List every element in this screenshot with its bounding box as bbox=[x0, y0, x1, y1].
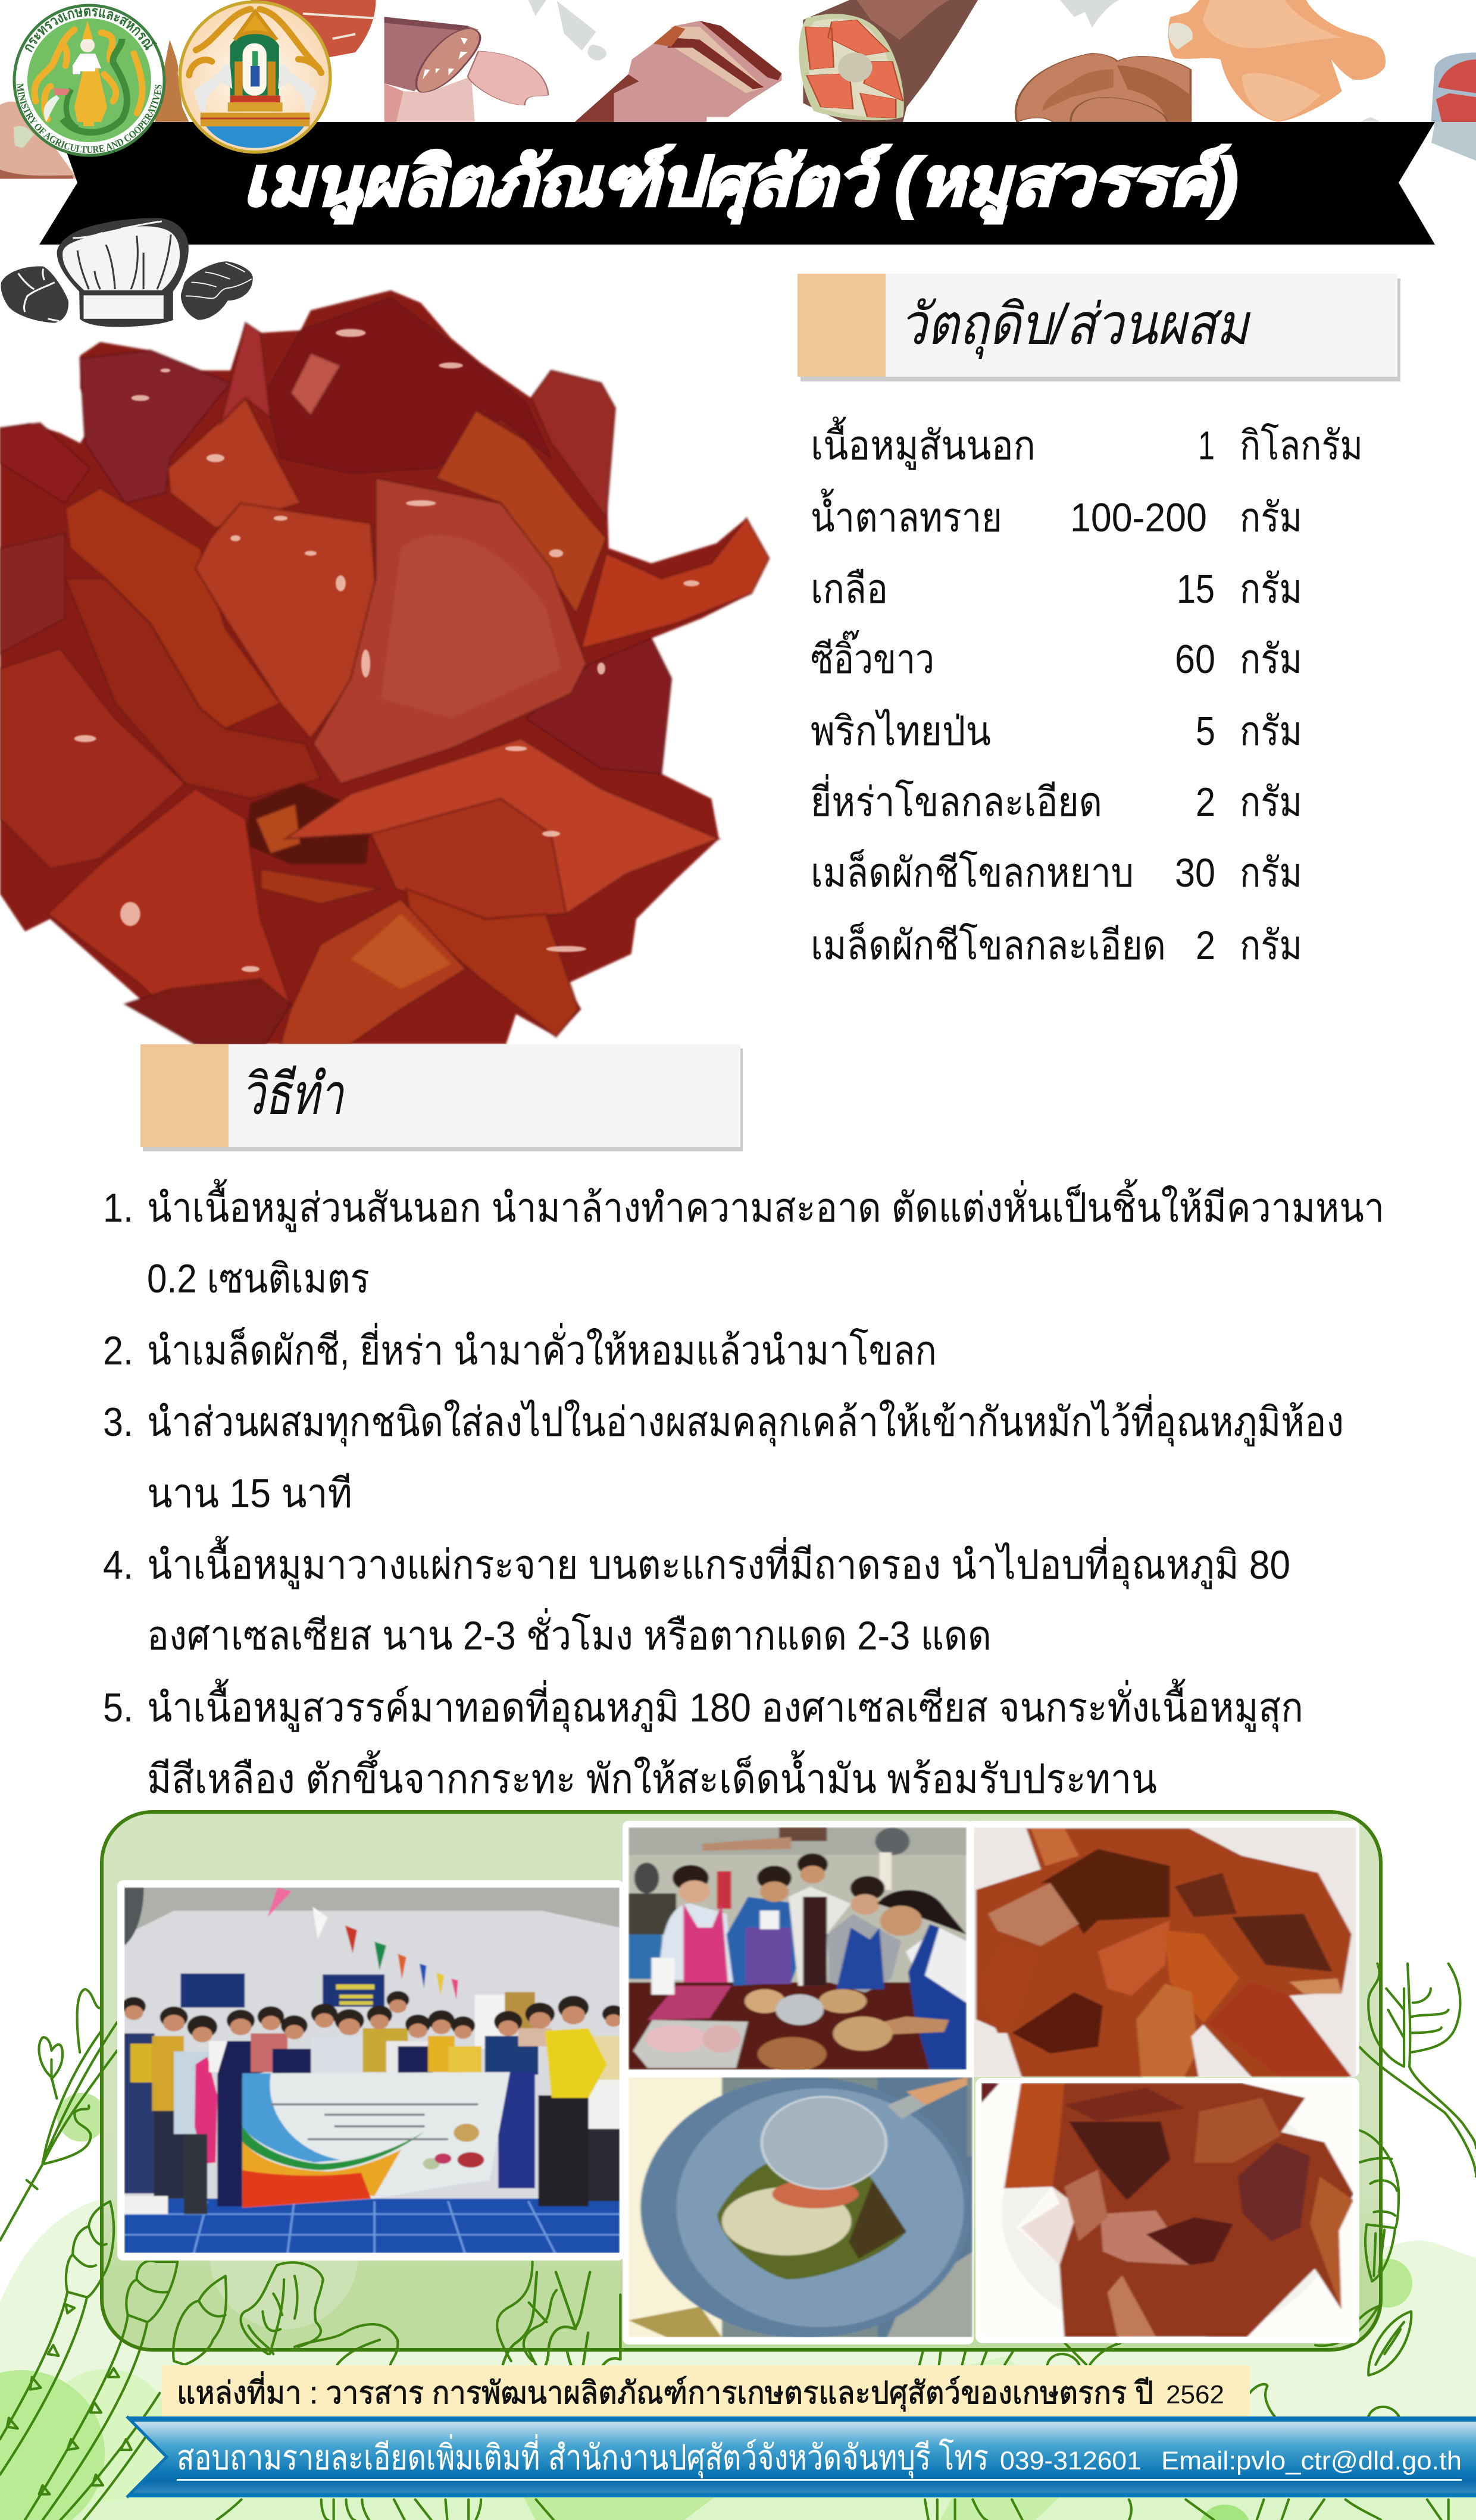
contact ribbon: 039-312601 bbox=[1000, 2446, 1142, 2475]
ingredients list: เนื้อหมูสันนอก bbox=[811, 417, 1036, 470]
illustration: ham tail at right edge below the ribbon top bbox=[1431, 122, 1476, 161]
icon: steak left bbox=[1, 267, 68, 323]
illustration: ham hock bbox=[799, 0, 978, 122]
photo: group with banner bbox=[117, 1880, 625, 2261]
illustration: grey knife shapes bbox=[529, 0, 1381, 122]
ingredients list: กรัม bbox=[1240, 850, 1302, 896]
method steps: มีสีเหลือง ตักขึ้นจากกระทะ พักให้สะเด็ดน้ำมัน พร้อมรับประทาน bbox=[147, 1750, 1157, 1802]
ingredients list: กรัม bbox=[1240, 780, 1302, 825]
method steps: นำส่วนผสมทุกชนิดใส่ลงไปในอ่างผสมคลุกเคล้าให้เข้ากันหมักไว้ที่อุณหภูมิห้อง bbox=[147, 1394, 1344, 1447]
contact ribbon bbox=[127, 2416, 1476, 2497]
logo: Ministry of Agriculture and Cooperatives: MINISTRY OF AGRICULTURE AND COOPERATIVES bbox=[17, 83, 162, 154]
method steps: 3. bbox=[103, 1400, 133, 1445]
method steps: นาน 15 นาที bbox=[147, 1471, 352, 1516]
ingredients list: พริกไทยป่น bbox=[811, 708, 991, 754]
panel: method heading bbox=[140, 1044, 743, 1151]
method steps: องศาเซลเซียส นาน 2-3 ชั่วโมง หรือตากแดด 2-3 แดด bbox=[147, 1608, 992, 1658]
ingredients list: 1 bbox=[1198, 423, 1215, 468]
icon: chef hat with steaks bbox=[1, 218, 253, 327]
panel: method heading: วิธีทำ bbox=[241, 1063, 345, 1126]
method steps: 4. bbox=[103, 1542, 133, 1588]
illustration: meats behind logos bbox=[0, 0, 376, 179]
panel: photo collage background bbox=[102, 1812, 1381, 2350]
icon: chef hat bbox=[57, 218, 189, 327]
ingredients list: เมล็ดผักชีโขลกละเอียด bbox=[811, 922, 1166, 968]
ingredients list: 2 bbox=[1196, 780, 1215, 825]
ingredients list: เกลือ bbox=[811, 566, 888, 612]
ingredients list: น้ำตาลทราย bbox=[811, 489, 1002, 540]
background: green hills bbox=[0, 2093, 1476, 2520]
background: leaf outlines, left side bbox=[0, 1989, 556, 2520]
ingredients list: 2 bbox=[1196, 923, 1215, 968]
ingredients list: 100-200 bbox=[1070, 495, 1207, 540]
panel: ingredients heading bbox=[798, 274, 1400, 381]
collage white frames bbox=[623, 1821, 1359, 2344]
ingredients list: 15 bbox=[1177, 566, 1215, 612]
background: leaf outlines, right side bbox=[920, 1964, 1476, 2520]
ingredients list: กรัม bbox=[1240, 709, 1302, 754]
illustration: sausage links bbox=[1016, 53, 1190, 122]
illustration: sliced ham bbox=[575, 21, 781, 122]
ingredients list: กรัม bbox=[1240, 566, 1302, 612]
contact ribbon: Email:pvlo_ctr@dld.go.th bbox=[1161, 2446, 1462, 2475]
ingredients list: กรัม bbox=[1240, 923, 1302, 968]
method steps: นำเนื้อหมูสวรรค์มาทอดที่อุณหภูมิ 180 องศาเซลเซียส จนกระทั่งเนื้อหมูสุก bbox=[147, 1679, 1303, 1732]
illustration: ham at right edge bbox=[1431, 52, 1476, 122]
title ribbon bbox=[39, 122, 1435, 245]
illustration: sausage slices bbox=[384, 17, 548, 122]
background: leaf lines under the source bar centre bbox=[500, 2272, 1068, 2520]
logo: Ministry of Agriculture and Cooperatives: กระทรวงเกษตรและสหกรณ์ bbox=[25, 8, 157, 52]
method steps: 1. bbox=[103, 1185, 133, 1231]
ingredients list: เมล็ดผักชีโขลกหยาบ bbox=[811, 849, 1134, 896]
ingredients list: ซีอิ๊วขาว bbox=[811, 630, 934, 682]
method steps: 5. bbox=[103, 1685, 133, 1730]
ingredients list: ยี่หร่าโขลกละเอียด bbox=[811, 774, 1102, 825]
illustration: chicken leg bbox=[1168, 0, 1386, 122]
ingredients list: 60 bbox=[1175, 637, 1215, 682]
ingredients list: 5 bbox=[1196, 709, 1215, 754]
contact ribbon: สอบถามรายละเอียดเพิ่มเติมที่ สำนักงานปศุสัตว์จังหวัดจันทบุรี โทร bbox=[177, 2434, 989, 2479]
method steps bbox=[103, 1179, 1384, 1802]
logo: Ministry of Agriculture and Cooperatives bbox=[13, 4, 165, 157]
photo: cooked pork, bottom right bbox=[981, 2083, 1353, 2340]
photo: preparing the pork bbox=[628, 1827, 967, 2071]
ingredients list bbox=[811, 417, 1363, 968]
photo: cooked pork, top right bbox=[974, 1827, 1356, 2077]
source bar: แหล่งที่มา : วารสาร การพัฒนาผลิตภัณฑ์การเกษตรและปศุสัตว์ของเกษตรกร ปี bbox=[177, 2371, 1153, 2412]
ingredients list: กรัม bbox=[1240, 495, 1302, 540]
method steps: 0.2 เซนติเมตร bbox=[147, 1256, 370, 1301]
panel border bbox=[102, 1812, 1381, 2350]
background: meat illustrations along the top bbox=[0, 0, 1476, 179]
logo: Department of Livestock Development bbox=[180, 2, 330, 152]
method steps: นำเนื้อหมูมาวางแผ่กระจาย บนตะแกรงที่มีถาดรอง นำไปอบที่อุณหภูมิ 80 bbox=[147, 1536, 1290, 1589]
photo: frying in a wok bbox=[628, 2077, 972, 2338]
photo: golden fried pork pile bbox=[0, 290, 769, 1044]
panel: ingredients heading: วัตถุดิบ/ส่วนผสม bbox=[899, 293, 1251, 359]
ingredients list: กิโลกรัม bbox=[1240, 422, 1363, 468]
illustration: deli meats bbox=[384, 0, 1476, 122]
source bar: 2562 bbox=[1166, 2380, 1224, 2409]
title: เมนูผลิตภัณฑ์ปศุสัตว์ (หมูสวรรค์) bbox=[243, 145, 1238, 223]
source bar bbox=[162, 2365, 1250, 2418]
icon: steak right bbox=[181, 261, 253, 320]
method steps: นำเมล็ดผักชี, ยี่หร่า นำมาคั่วให้หอมแล้วนำมาโขลก bbox=[147, 1323, 937, 1373]
ingredients list: 30 bbox=[1175, 850, 1215, 896]
method steps: 2. bbox=[103, 1328, 133, 1373]
ingredients list: กรัม bbox=[1240, 637, 1302, 682]
